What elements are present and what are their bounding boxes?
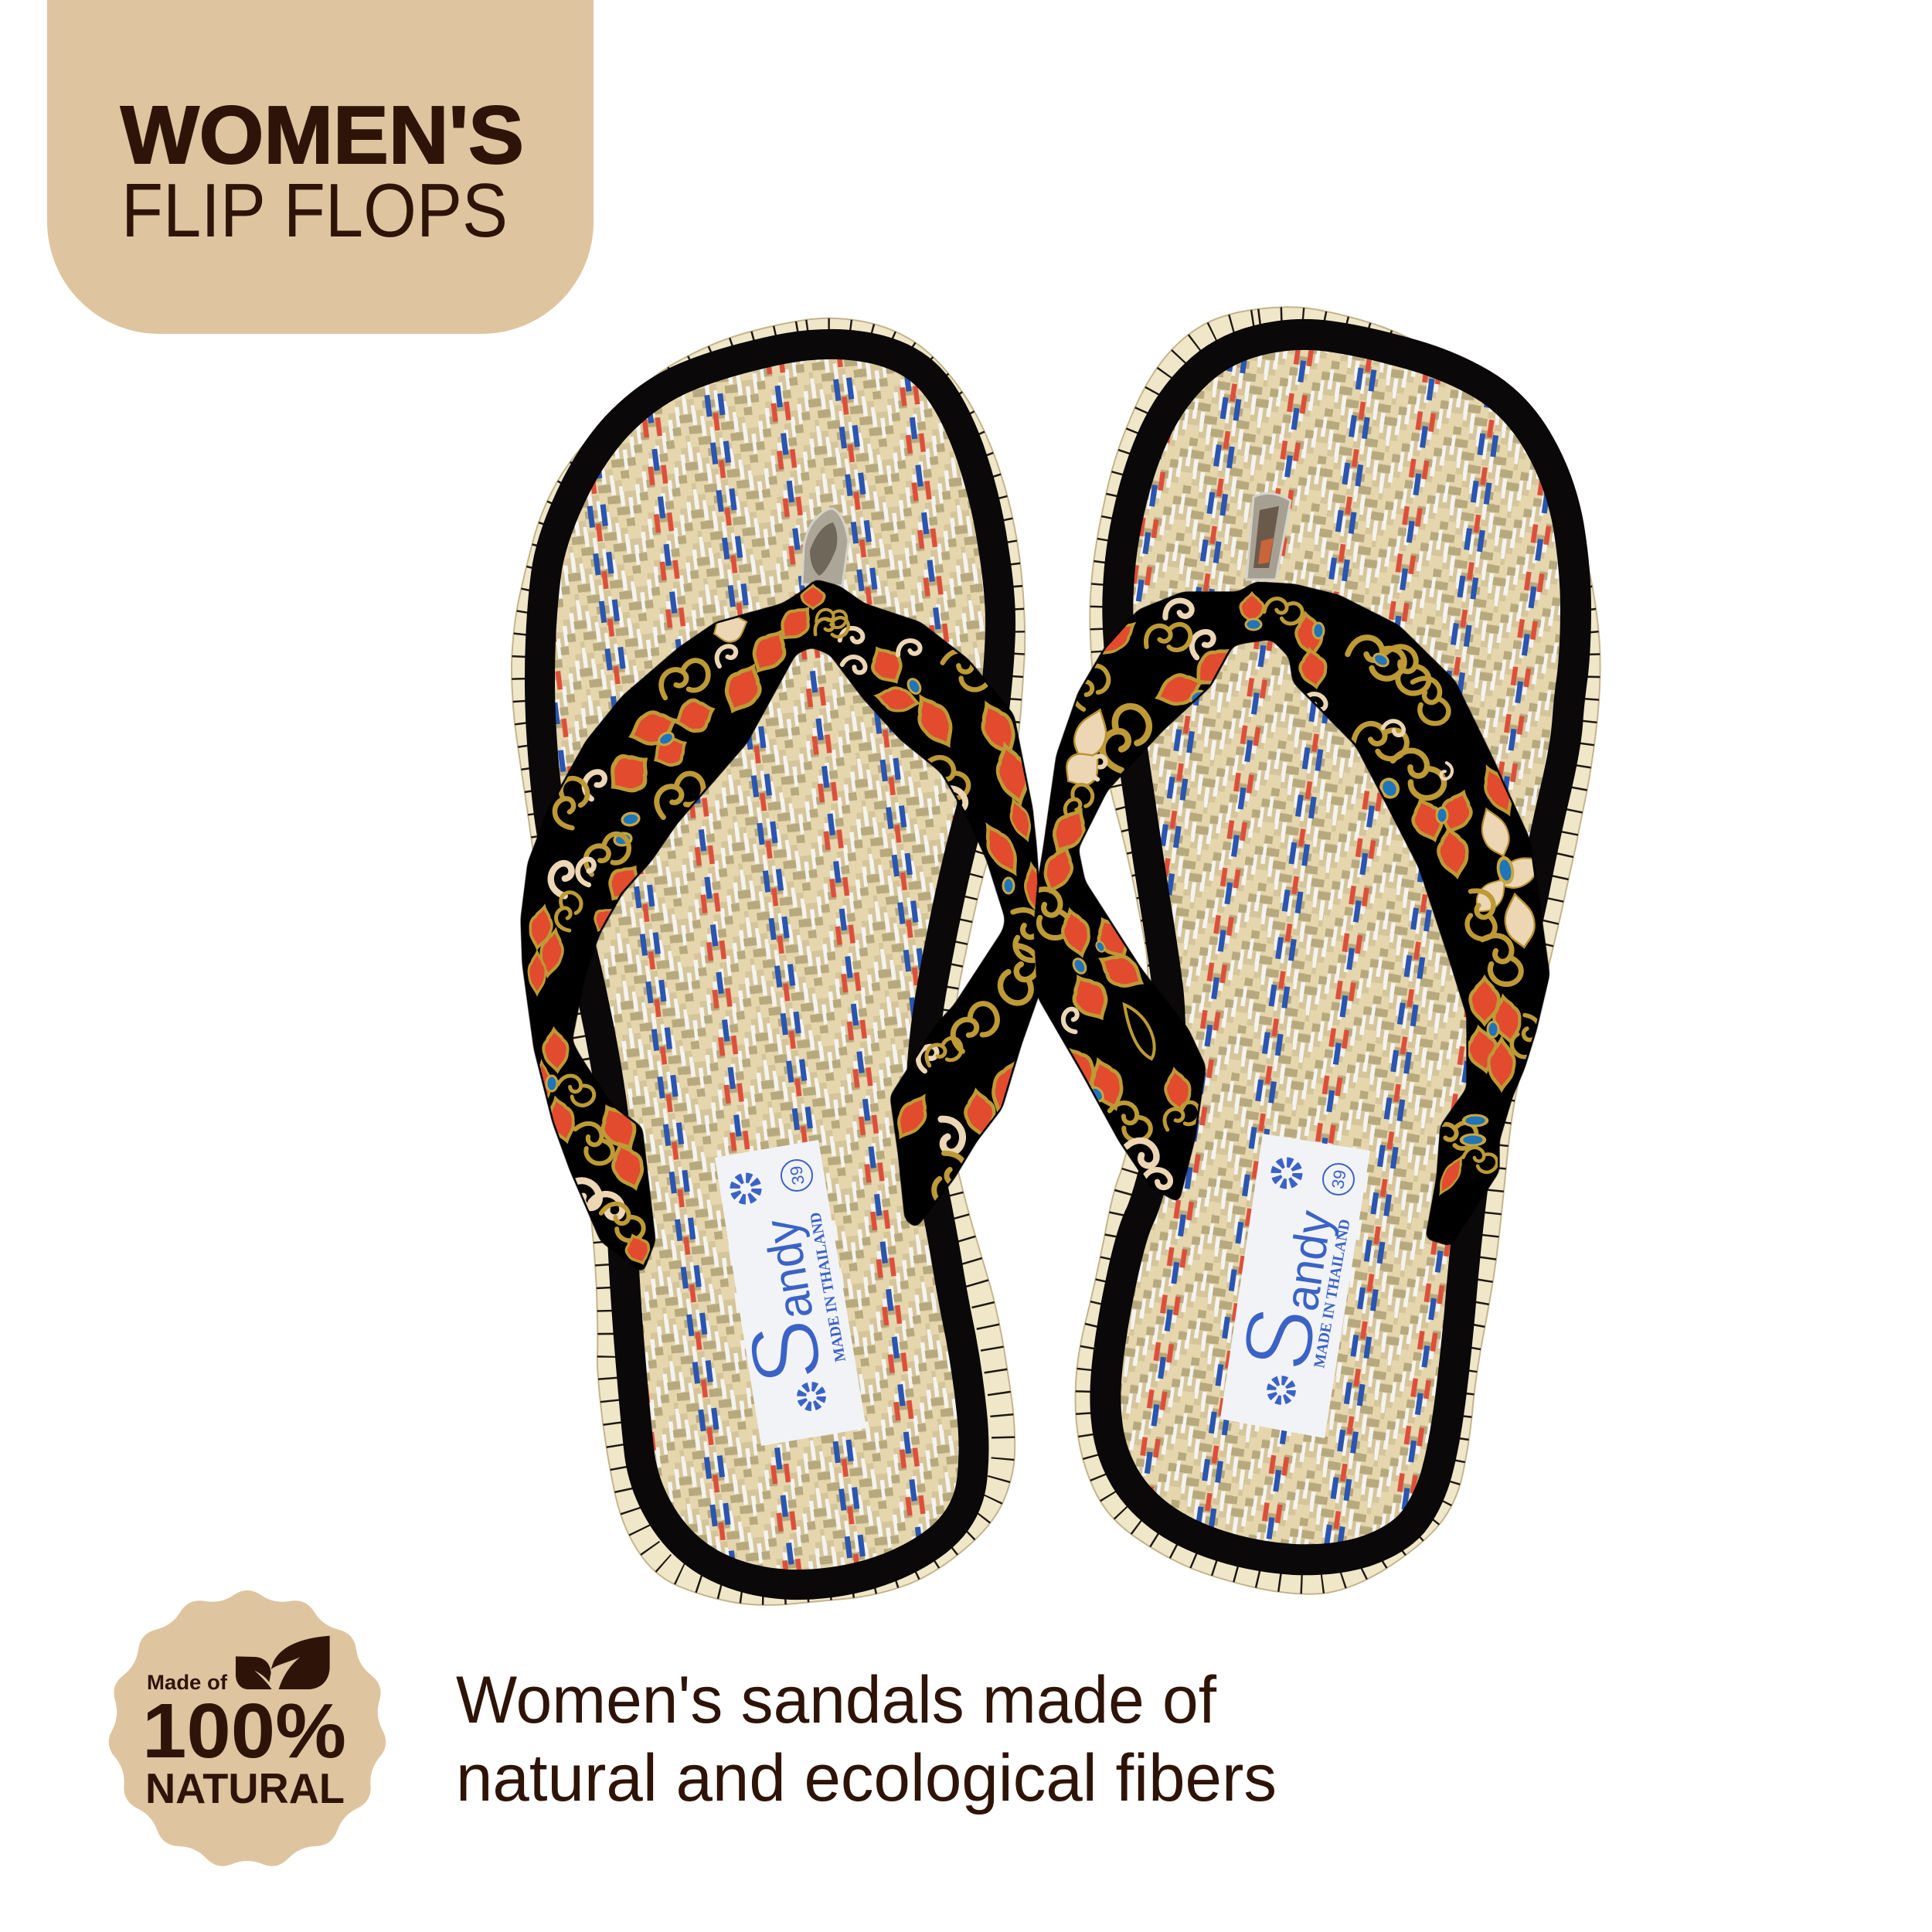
right sandal (1028, 307, 1600, 1594)
left sandal (512, 318, 1050, 1605)
right black border (1121, 350, 1560, 1544)
badge: made of 100% natural (109, 1590, 386, 1866)
label brand name: Sandy (1222, 1201, 1352, 1377)
left black border (555, 359, 985, 1570)
left sole edge with stitching (512, 318, 1025, 1605)
title panel (47, 0, 594, 334)
left strap (522, 581, 1050, 1270)
title: flip flops: FLIP FLOPS (121, 168, 508, 253)
description text (456, 1663, 1277, 1815)
label made in thailand: MADE IN THAILAND (807, 1211, 849, 1363)
right woven insole (1121, 350, 1560, 1544)
right sole edge with stitching (1076, 307, 1600, 1594)
left toe post (802, 509, 849, 586)
badge text: made of: Made of (147, 1671, 228, 1694)
label size 39: 39 (786, 1165, 808, 1186)
right strap floral print (1028, 594, 1549, 1197)
left brand label (712, 1140, 866, 1446)
panel background (47, 0, 594, 334)
label size 39: 39 (1328, 1168, 1350, 1190)
icon: leaves (236, 1636, 330, 1689)
badge text: natural: NATURAL (145, 1764, 345, 1812)
left strap floral print (527, 586, 1050, 1267)
description text: natural and ecological fibers (456, 1741, 1277, 1815)
label flower bottom (801, 1386, 821, 1406)
right brand label (1220, 1134, 1370, 1438)
badge scalloped background (109, 1590, 386, 1866)
label size 39 (1323, 1164, 1354, 1195)
label brand name: Sandy (712, 1213, 844, 1391)
label flower bottom (1271, 1380, 1291, 1400)
left woven insole (555, 359, 985, 1570)
badge text: 100%: 100% (142, 1688, 346, 1774)
label flower top (735, 1178, 757, 1199)
label size 39 (781, 1160, 812, 1191)
description text: Women's sandals made of (456, 1663, 1217, 1737)
label made in thailand: MADE IN THAILAND (1311, 1218, 1354, 1369)
label flower top (1276, 1162, 1298, 1184)
title: women's: WOMEN'S (121, 90, 524, 181)
right toe post (1247, 494, 1291, 580)
right strap (1028, 583, 1549, 1244)
